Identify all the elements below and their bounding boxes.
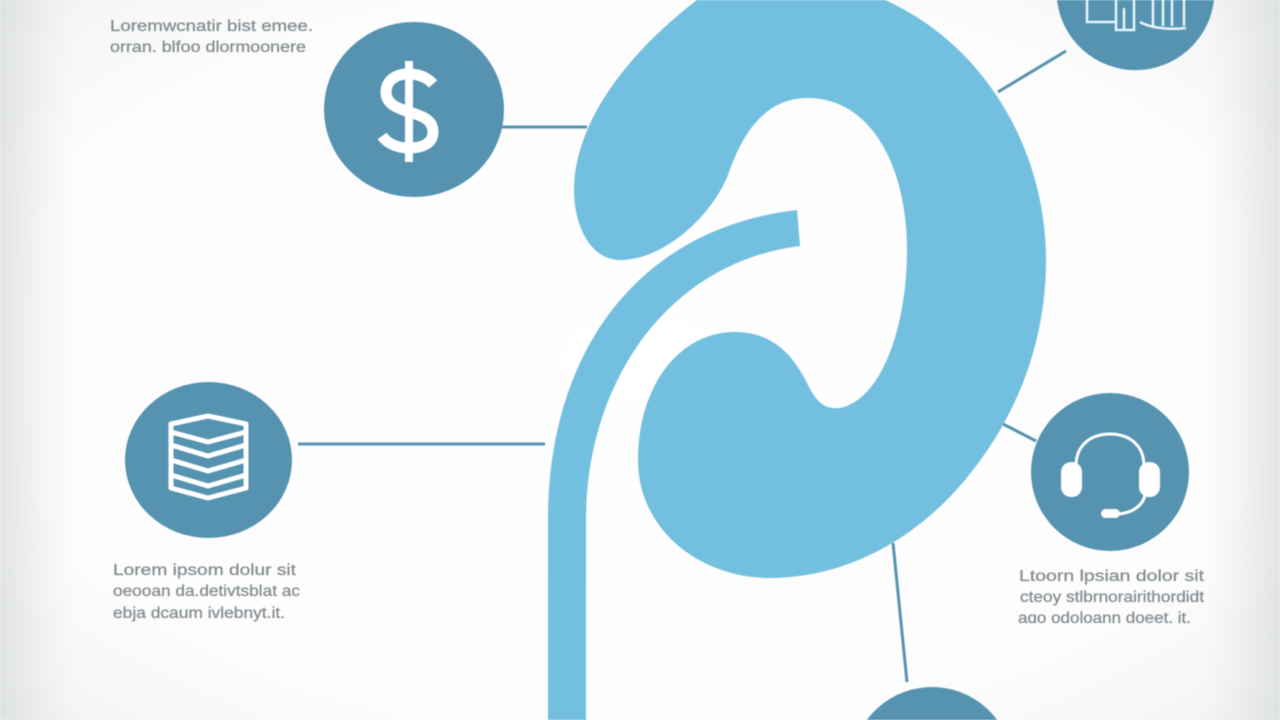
icon circle: stacked layers — [125, 382, 292, 538]
kidney shape — [574, 0, 1046, 578]
text block: lower right: aɑo odoloann doeet. it. — [1018, 610, 1191, 627]
text block: top left: Loremwcnatir bist emee. — [110, 18, 313, 35]
connector: stack to tube — [298, 442, 545, 446]
connector: headset to kidney — [1003, 424, 1036, 441]
text block: lower right: Ltoorn lpsian dolor sit — [1019, 568, 1205, 585]
icon circle: dollar — [324, 22, 504, 197]
connector: top right to kidney — [998, 51, 1066, 92]
text block: lower right — [1018, 568, 1205, 627]
icon: line figures — [1087, 0, 1186, 30]
icon circle: people and documents, top right — [1057, 0, 1214, 70]
text block: lower left: oeooan da.detivtsblat ac — [113, 583, 300, 600]
icon: dollar sign — [382, 61, 433, 162]
text block: lower left: Lorem ipsom dolur sit — [113, 562, 297, 579]
icon circle: headset — [1031, 393, 1189, 551]
text block: lower left: ebja dcaum ivlebnyt.it. — [113, 605, 285, 622]
text block: top left: orran. blfoo dlormoonere — [110, 39, 306, 56]
icon: headset — [1061, 434, 1160, 518]
text block: lower left — [113, 562, 300, 622]
icon: layer stack — [171, 416, 246, 498]
ureter tube — [548, 210, 800, 720]
text block: top left — [110, 18, 313, 56]
icon circle: bottom — [867, 687, 997, 720]
text block: lower right: cteoy stlbrnorairithordidt — [1020, 589, 1205, 606]
connector: dollar to kidney — [500, 126, 587, 128]
connector: bottom circle to kidney — [893, 543, 907, 682]
